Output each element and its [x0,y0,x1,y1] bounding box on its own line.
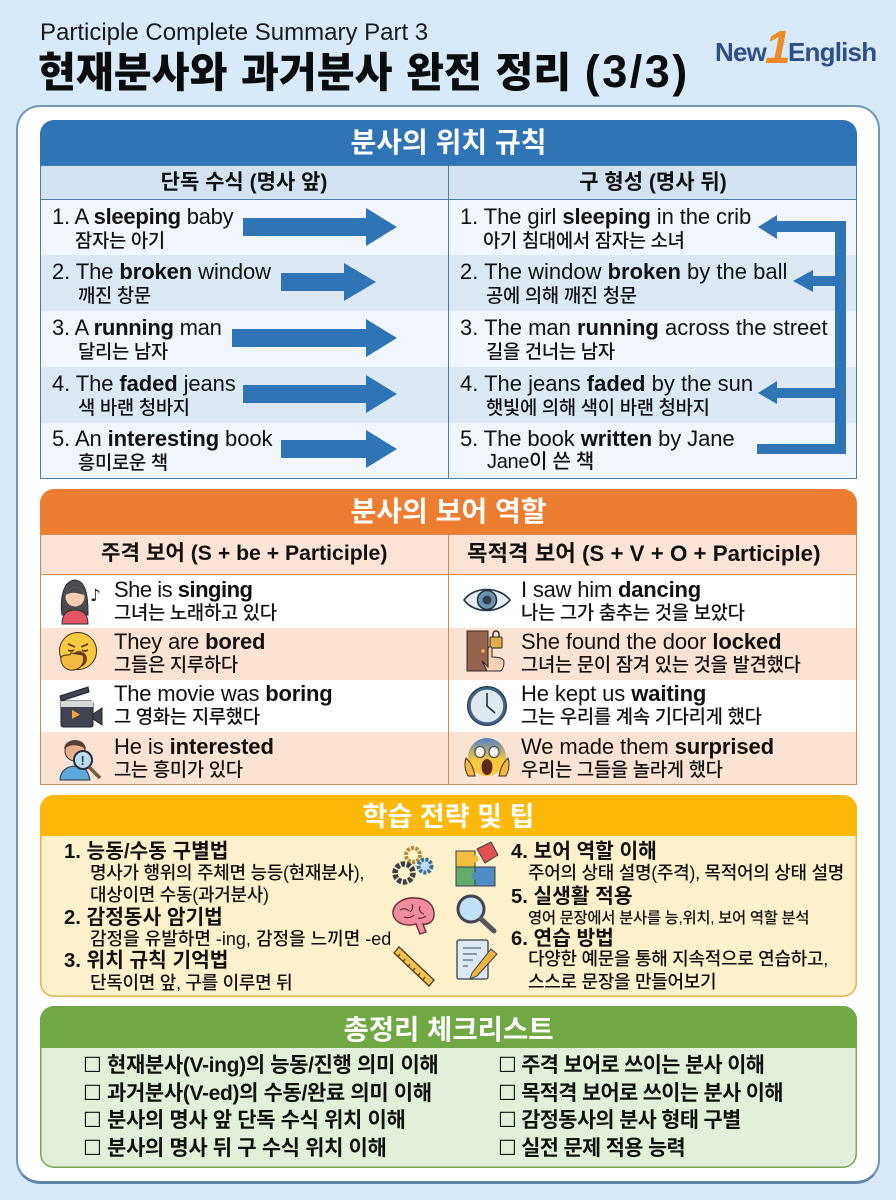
check item: ☐ 감정동사의 분사 형태 구별 [498,1109,741,1132]
bracket arrow: pointing back to nouns [757,215,846,454]
item 3 [460,315,828,364]
icon: magnifying glass [453,892,499,934]
tip 3 [64,948,324,994]
panel: checklist [40,1006,857,1168]
item 1: 아기 침대에서 잠자는 소녀 [483,226,685,253]
translation: 우리는 그들을 놀라게 했다 [521,755,723,782]
arrow 4 [243,375,397,413]
item 1 [460,204,751,253]
item 1 [52,204,234,253]
arrow 1 [243,208,397,246]
item 4 [52,371,236,420]
column headers [40,534,857,574]
tip 2: 감정을 유발하면 -ing, 감정을 느끼면 -ed [90,929,391,949]
sentence: They are bored [114,629,265,654]
item 5 [460,426,734,473]
tip 1: 1. 능동/수동 구별법 [64,841,228,863]
item 1: 잠자는 아기 [75,226,165,253]
left examples: subject complement [59,577,332,782]
subtitle: Participle Complete Summary Part 3 [40,19,428,46]
translation: 그 영화는 지루했다 [114,702,260,729]
icon: screaming face [462,734,512,784]
row: surprised [462,734,847,784]
item 2 [460,259,787,308]
icon: puzzle [453,841,499,887]
sentence: He is interested [114,734,274,759]
sentence: She found the door locked [521,629,781,654]
item 3: 3. The man running across the street [460,315,828,340]
panel heading [40,795,857,836]
checklist right column [498,1052,798,1164]
right column header: 구 형성 (명사 뒤) [579,171,727,194]
item 5: 5. An interesting book [52,426,272,451]
tips right column [511,838,851,994]
item 3: 3. A running man [52,315,222,340]
check item: ☐ 목적격 보어로 쓰이는 분사 이해 [498,1082,783,1105]
item 4: 4. The jeans faded by the sun [460,371,753,396]
tip 4: 4. 보어 역할 이해 [511,841,657,863]
arrow 5 [281,430,397,468]
row: locked [466,629,800,677]
icon: ruler [390,944,436,990]
row: singing [60,577,277,625]
translation: 그들은 지루하다 [114,650,238,677]
icon: eye [463,588,511,612]
icon: notepad and pencil [453,938,499,982]
tip 4 [511,839,849,885]
row: bored [59,629,265,677]
tip 1: 대상이면 수동(과거분사) [90,885,269,905]
panel: complement role [40,489,857,785]
tip 2: 2. 감정동사 암기법 [64,907,223,929]
tip 5 [511,884,811,930]
icon: movie clapper [59,686,102,728]
sentence: He kept us waiting [521,681,706,706]
logo: 1 [765,21,791,73]
sentence: The movie was boring [114,681,332,706]
icon: locked door [466,630,504,672]
icon: clock [467,686,507,726]
right examples: object complement [463,577,800,782]
left column header: 주격 보어 (S + be + Participle) [101,542,387,565]
translation: 그녀는 문이 잠겨 있는 것을 발견했다 [521,650,800,677]
left column header: 단독 수식 (명사 앞) [161,171,327,194]
title: 현재분사와 과거분사 완전 정리 (3/3) [38,39,690,99]
row: waiting [467,681,762,729]
arrow 2 [281,263,376,301]
sentence: She is singing [114,577,252,602]
translation: 나는 그가 춤추는 것을 보았다 [521,598,745,625]
right examples: phrase after noun [460,204,828,473]
item 5 [52,426,272,475]
icon: brain [390,896,436,938]
tip 6: 스스로 문장을 만들어보기 [528,972,716,992]
item 3: 달리는 남자 [78,337,168,364]
item 2 [52,259,271,308]
tips left column [64,838,394,994]
icon: yawning face [59,632,97,671]
item 5: Jane이 쓴 책 [487,451,594,473]
row: interested [60,734,274,782]
tip 1: 명사가 행위의 주체면 능등(현재분사), [90,863,364,883]
sentence: I saw him dancing [521,577,701,602]
check item: ☐ 현재분사(V-ing)의 능동/진행 의미 이해 [83,1054,438,1077]
arrow 3 [232,319,397,357]
checklist left column [83,1052,453,1164]
check item: ☐ 실전 문제 적용 능력 [498,1137,685,1160]
panel heading: 총정리 체크리스트 [343,1007,554,1047]
item 1: 1. The girl sleeping in the crib [460,204,751,229]
panel: position rules [40,120,857,479]
arrows: pointing right [232,208,397,468]
item 4 [460,371,753,420]
icon: singing woman [60,580,101,624]
tip 6: 6. 연습 방법 [511,928,614,950]
item 5: 5. The book written by Jane [460,426,734,451]
check item: ☐ 과거분사(V-ed)의 수동/완료 의미 이해 [83,1082,432,1105]
tip 3: 3. 위치 규칙 기억법 [64,950,228,972]
check item: ☐ 주격 보어로 쓰이는 분사 이해 [498,1054,764,1077]
panel heading: 분사의 보어 역할 [350,490,546,530]
translation: 그는 우리를 계속 기다리게 했다 [521,702,762,729]
tip 5: 5. 실생활 적용 [511,886,632,908]
translation: 그녀는 노래하고 있다 [114,598,277,625]
tip 1 [64,839,374,911]
icon: gears [390,842,438,890]
tip 3: 단독이면 앞, 구를 이루면 뒤 [90,973,292,993]
item 5: 흥미로운 책 [78,448,168,475]
panel heading [40,1006,857,1048]
item 2: 2. The broken window [52,259,271,284]
tip 6: 다양한 예문을 통해 지속적으로 연습하고, [528,949,828,969]
panel heading: 학습 전략 및 팁 [363,795,534,834]
item 3 [52,315,222,364]
tip 5: 영어 문장에서 분사를 능,위치, 보어 역할 분석 [528,910,809,927]
icon: person with magnifier [60,740,102,780]
icon: person with magnifier: ! [80,753,85,768]
panel heading [40,120,857,165]
item 4: 색 바랜 청바지 [78,393,190,420]
tip 6 [511,926,831,994]
item 2: 깨진 창문 [78,281,151,308]
tip 4: 주어의 상태 설명(주격), 목적어의 상태 설명 [528,863,844,883]
panel heading [40,489,857,534]
column headers [40,165,857,200]
left examples: attributive before noun [52,204,272,475]
translation: 그는 흥미가 있다 [114,755,243,782]
check item: ☐ 분사의 명사 뒤 구 수식 위치 이해 [83,1137,386,1160]
item 4: 햇빛에 의해 색이 바랜 청바지 [486,393,710,420]
logo: English [788,37,876,67]
right column header: 목적격 보어 (S + V + O + Participle) [467,541,821,566]
check item: ☐ 분사의 명사 앞 단독 수식 위치 이해 [83,1109,405,1132]
logo: New [715,37,766,67]
row: dancing [463,577,745,625]
item 3: 길을 건너는 남자 [486,337,615,364]
item 2: 공에 의해 깨진 청문 [486,281,637,308]
sentence: We made them surprised [521,734,774,759]
item 2: 2. The window broken by the ball [460,259,787,284]
panel: study tips [40,795,857,997]
icon: singing woman: ♪ [90,586,101,606]
logo [715,21,876,73]
tip 2 [64,905,394,951]
panel heading: 분사의 위치 규칙 [350,121,546,161]
item 4: 4. The faded jeans [52,371,236,396]
item 1: 1. A sleeping baby [52,204,233,229]
row: boring [59,681,332,729]
